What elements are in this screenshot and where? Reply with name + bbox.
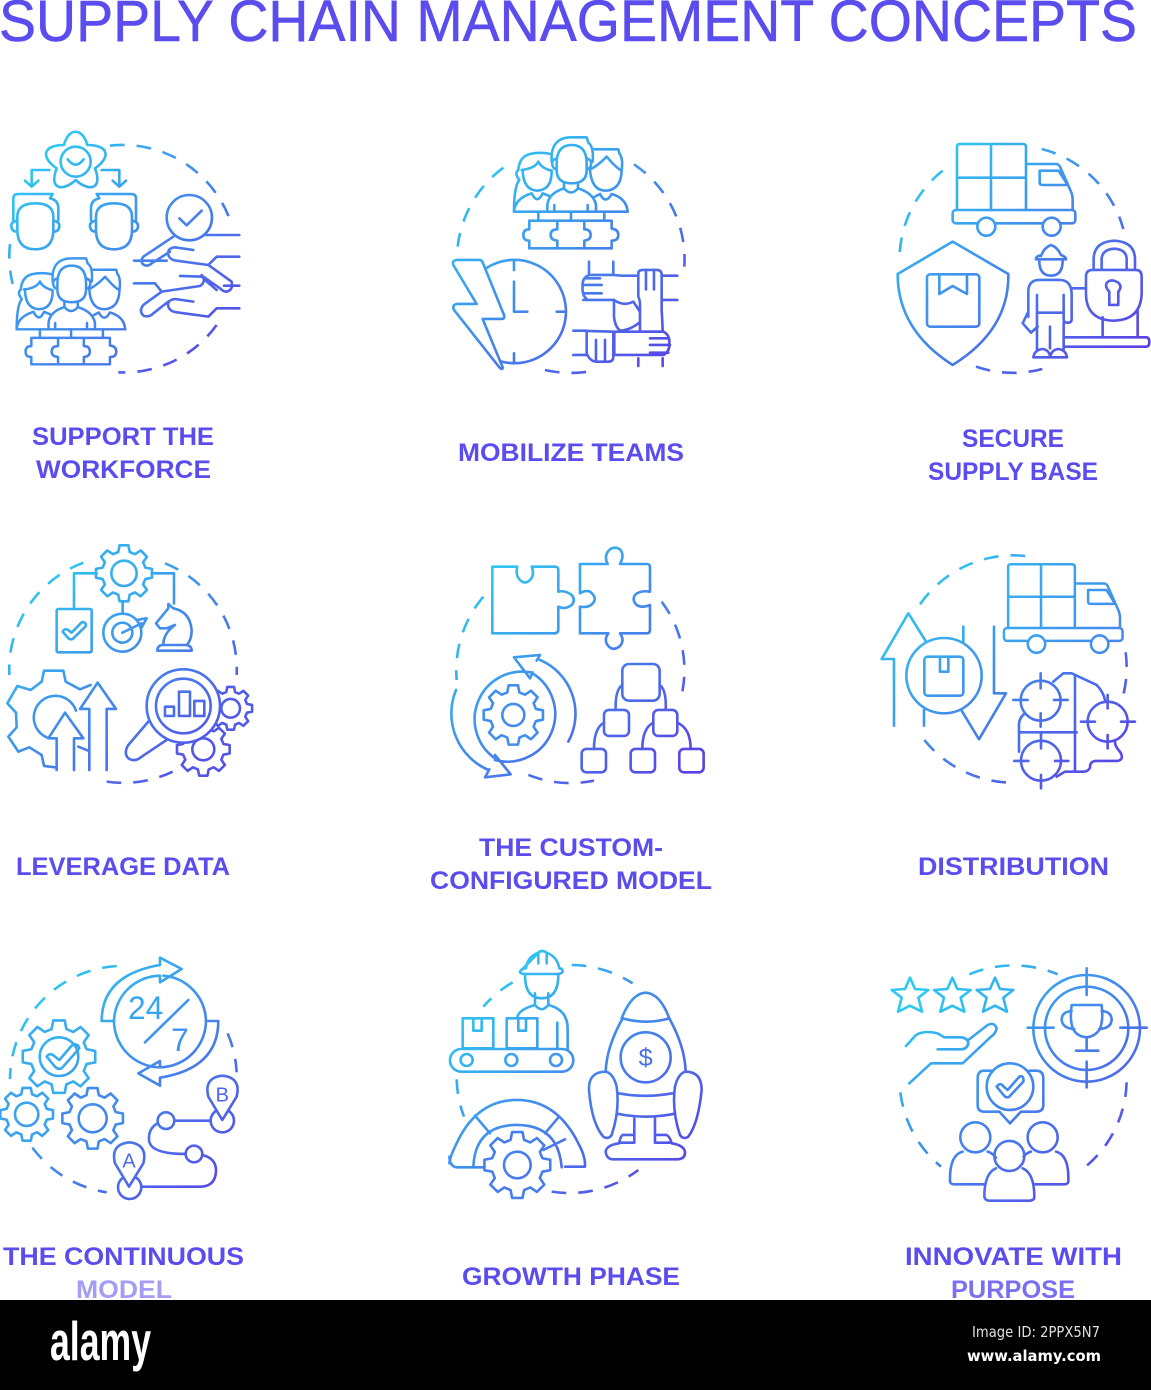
icon: distribution [882, 555, 1135, 788]
icon: custom-configured model [451, 548, 704, 783]
organisation hierarchy [582, 664, 704, 772]
label: support the workforce: SUPPORT THE [32, 423, 214, 451]
team with puzzle [17, 258, 125, 364]
image id: Image ID: 2PPX5N7 [972, 1323, 1100, 1341]
puzzle piece left [492, 567, 574, 633]
group of people [950, 1122, 1068, 1201]
padlock on base [1064, 241, 1149, 347]
three rating stars [892, 978, 1013, 1012]
label: the continuous model [3, 1243, 244, 1304]
hands with magnifier [134, 195, 239, 317]
label: the continuous model: MODEL [76, 1276, 172, 1304]
24/7 cycle: 7 [171, 1022, 189, 1058]
24/7 cycle [102, 958, 218, 1086]
route from A to B: B [216, 1085, 229, 1107]
map with locations [1013, 673, 1135, 788]
lightning bolt and clock [453, 260, 566, 369]
label: support the workforce: WORKFORCE [36, 456, 211, 484]
label: leverage data: LEVERAGE DATA [16, 853, 230, 881]
route from A to B: A [122, 1151, 136, 1173]
gears behind magnifier [177, 687, 252, 776]
gear with growth arrows [7, 671, 116, 770]
stock photo footer bar [0, 1300, 1151, 1390]
icon: mobilize teams [453, 137, 685, 373]
icon: support the workforce [9, 132, 239, 372]
target with trophy [1028, 968, 1147, 1087]
alamy logo: alamy [50, 1310, 151, 1372]
icon: leverage data [7, 545, 252, 783]
label: innovate with purpose [905, 1243, 1122, 1304]
website: www.alamy.com [967, 1347, 1101, 1365]
label: secure supply base: SUPPLY BASE [928, 458, 1098, 486]
label: support the workforce [32, 423, 214, 484]
speech bubble with check [978, 1063, 1043, 1123]
label: the custom-configured model: THE CUSTOM- [479, 834, 663, 862]
label: secure supply base [928, 425, 1098, 486]
open hand [906, 1024, 997, 1083]
four linked hands [573, 262, 677, 366]
team with puzzle [514, 137, 628, 248]
label: innovate with purpose: INNOVATE WITH [905, 1243, 1122, 1271]
label: secure supply base: SECURE [962, 425, 1064, 453]
label: the custom-configured model: CONFIGURED MODEL [430, 867, 712, 895]
target with arrow [103, 614, 147, 652]
label: the continuous model: THE CONTINUOUS [3, 1243, 244, 1271]
route from A to B [114, 1076, 238, 1199]
delivery truck [953, 144, 1075, 236]
up and down arrows with parcel [882, 613, 1006, 739]
chess knight [156, 604, 192, 651]
label: growth phase: GROWTH PHASE [462, 1263, 680, 1291]
icon: secure supply base [898, 144, 1149, 373]
icon: the continuous model [0, 958, 238, 1199]
checklist document [57, 609, 92, 652]
icon: growth phase [449, 951, 702, 1198]
label: distribution: DISTRIBUTION [918, 853, 1109, 881]
label: mobilize teams: MOBILIZE TEAMS [458, 439, 684, 467]
shield with parcel [898, 242, 1008, 365]
24/7 cycle: 24 [128, 990, 163, 1026]
worker [1023, 245, 1072, 357]
delivery truck [1004, 564, 1123, 653]
speedometer with gear [449, 1100, 585, 1198]
star rating badge with arrows [25, 132, 126, 187]
rocket with dollar: $ [639, 1044, 653, 1072]
worker at conveyor [450, 951, 573, 1072]
icon: innovate with purpose [892, 965, 1147, 1201]
three gears with check [0, 1020, 123, 1149]
label: innovate with purpose: PURPOSE [951, 1276, 1075, 1304]
two employee heads [11, 194, 138, 249]
rocket with dollar [589, 993, 702, 1159]
label: the custom-configured model [430, 834, 712, 895]
magnifier with bar chart [126, 669, 220, 760]
gear flow chart [74, 545, 174, 613]
rotating gear cycle [451, 655, 575, 777]
puzzle piece right [580, 548, 650, 649]
